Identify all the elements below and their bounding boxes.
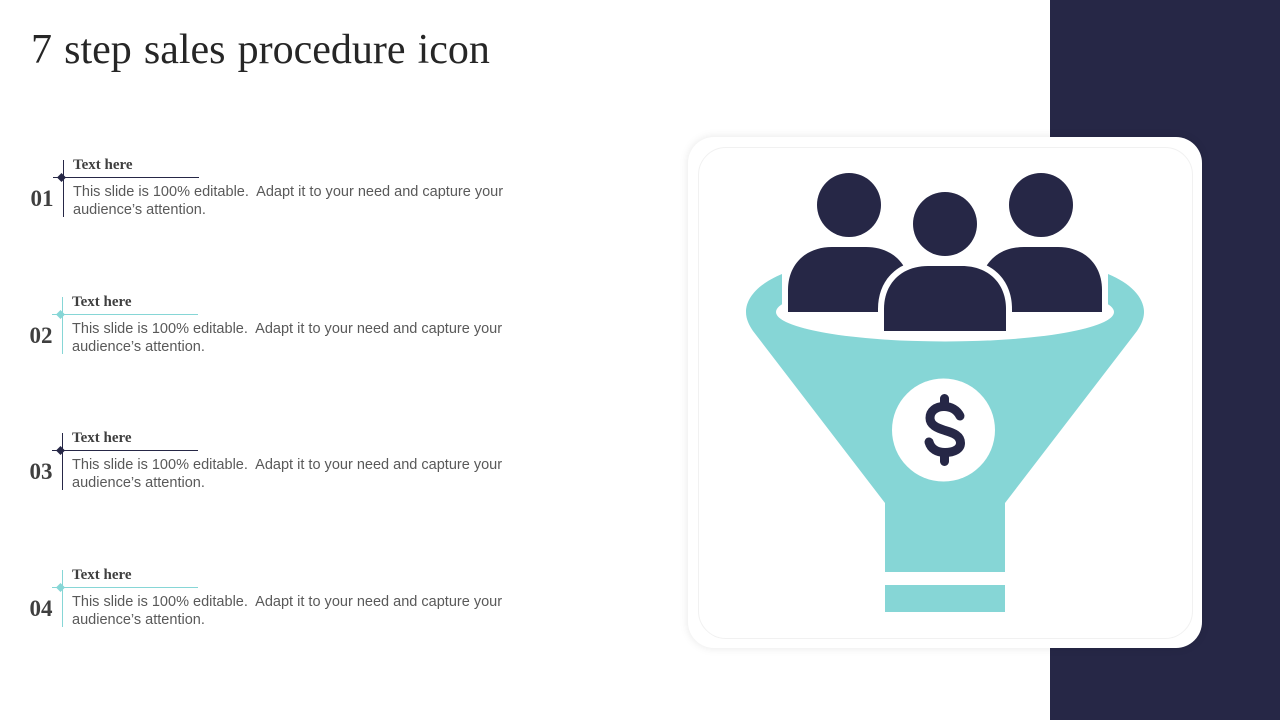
inner card outline	[698, 147, 1193, 639]
person left	[788, 173, 910, 312]
step 01 marker	[53, 160, 199, 217]
step 03 text: audience’s attention.	[72, 475, 205, 491]
step 01	[30, 157, 503, 218]
step 04 text: audience’s attention.	[72, 612, 205, 628]
step 04 marker	[52, 570, 198, 627]
step 01 text	[73, 184, 503, 218]
step 04 heading: Text here	[72, 567, 132, 583]
step 02 text	[72, 321, 502, 355]
step 03	[30, 430, 502, 491]
step 03 marker	[52, 433, 198, 490]
step 03 text	[72, 457, 502, 491]
funnel base bar	[885, 585, 1005, 612]
person centre	[878, 192, 1012, 331]
step 01 text: This slide is 100% editable. Adapt it to your need and capture your	[73, 184, 503, 200]
step 02 heading: Text here	[72, 294, 132, 310]
step 03 number: 03	[30, 459, 52, 484]
step 02 number: 02	[30, 323, 52, 348]
person right	[980, 173, 1102, 312]
step 03 heading: Text here	[72, 430, 132, 446]
step 02	[30, 294, 502, 355]
title: 7 step sales procedure icon	[31, 27, 490, 73]
step 01 number: 01	[30, 186, 54, 211]
step 03 text: This slide is 100% editable. Adapt it to your need and capture your	[72, 457, 502, 473]
navy side band	[1050, 0, 1280, 720]
dollar badge	[892, 378, 995, 482]
step 02 text: audience’s attention.	[72, 339, 205, 355]
step 04 text: This slide is 100% editable. Adapt it to your need and capture your	[72, 594, 502, 610]
step 01 heading: Text here	[73, 157, 133, 173]
step 04 number: 04	[30, 596, 52, 621]
step 04 text	[72, 594, 502, 628]
step 01 text: audience’s attention.	[73, 202, 206, 218]
step 02 text: This slide is 100% editable. Adapt it to your need and capture your	[72, 321, 502, 337]
funnel body	[746, 260, 1144, 572]
step 04	[30, 567, 502, 628]
step 02 marker	[52, 297, 198, 354]
icon card	[688, 137, 1202, 648]
